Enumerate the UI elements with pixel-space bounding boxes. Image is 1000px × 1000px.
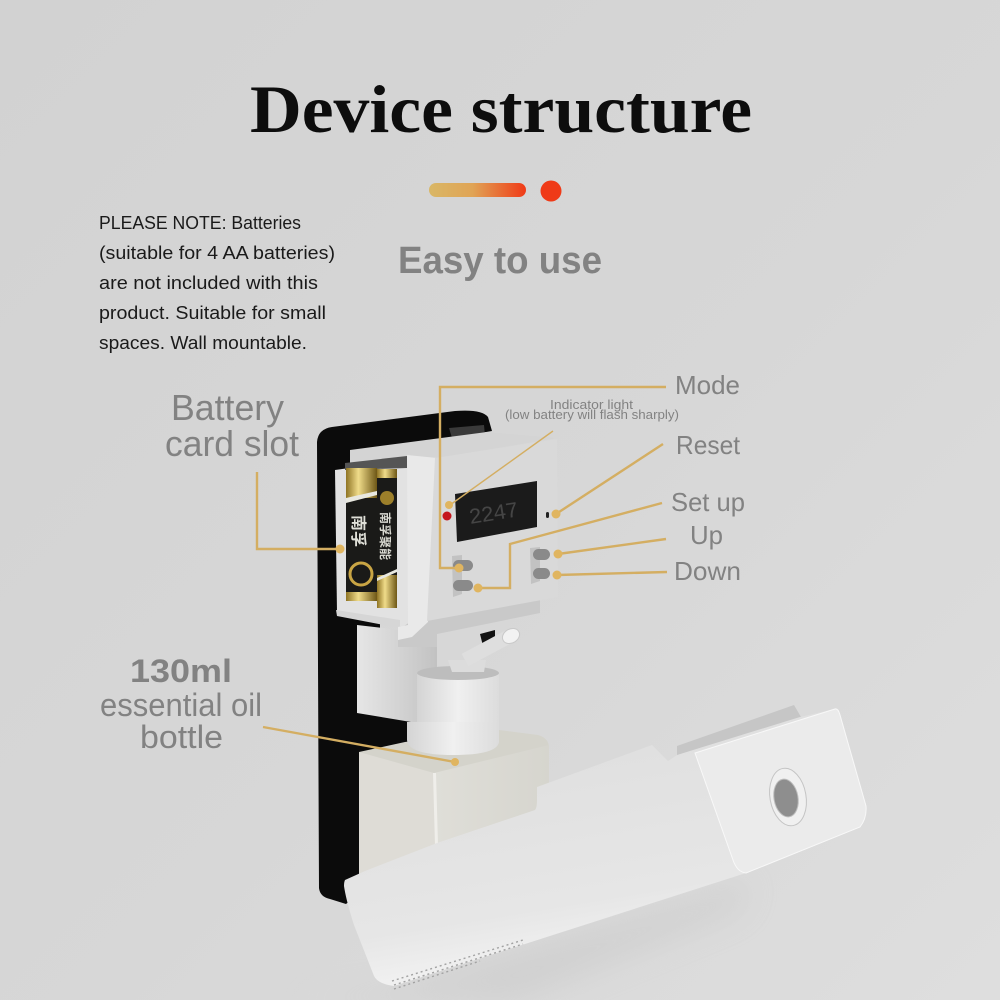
compartment floor bbox=[336, 610, 400, 628]
battery note bbox=[99, 213, 335, 353]
vent holes bbox=[392, 940, 523, 989]
LCD screen: 2247 bbox=[467, 498, 520, 531]
label: down: Down bbox=[674, 556, 741, 586]
nozzle bbox=[448, 625, 522, 672]
line: reset bbox=[556, 444, 663, 514]
label: indicator light: Indicator light bbox=[550, 397, 633, 412]
black back plate bbox=[317, 411, 492, 904]
callout lines bbox=[257, 387, 667, 762]
atomizer cylinder bbox=[407, 666, 499, 755]
batteries: 南孚 bbox=[349, 515, 367, 547]
label: battery card slot bbox=[165, 387, 299, 464]
module front face bbox=[427, 439, 558, 621]
battery note: are not included with this bbox=[99, 273, 318, 293]
callout dots bbox=[336, 501, 562, 766]
left button pair bbox=[452, 555, 473, 597]
lid body bbox=[344, 709, 866, 986]
label: 130ml essential oil bottle: essential oil bbox=[100, 687, 262, 723]
label: set up: Set up bbox=[671, 487, 745, 517]
line: down bbox=[557, 572, 667, 575]
decorative gradient bar and dot bbox=[429, 180, 562, 202]
mechanism block bbox=[357, 625, 437, 725]
module underside bbox=[398, 598, 540, 647]
line: bottle bbox=[263, 727, 455, 762]
sensor lens bbox=[765, 765, 811, 829]
lid cast shadow bbox=[290, 880, 750, 1000]
title: Device structure bbox=[250, 71, 752, 147]
battery note: product. Suitable for small bbox=[99, 303, 326, 323]
lid cap bbox=[695, 709, 866, 873]
LCD screen bbox=[455, 481, 537, 542]
label: 130ml essential oil bottle bbox=[100, 653, 262, 755]
batteries bbox=[346, 468, 397, 608]
label: battery card slot: Battery bbox=[171, 387, 284, 428]
compartment shadow bbox=[345, 456, 407, 470]
top button bbox=[449, 425, 485, 438]
label: indicator light: (low battery will flash sharply) bbox=[505, 407, 679, 422]
label: 130ml essential oil bottle: 130ml bbox=[130, 653, 232, 689]
reset pinhole bbox=[546, 512, 549, 518]
module top surface bbox=[350, 432, 557, 464]
battery note: PLEASE NOTE: Batteries bbox=[99, 213, 301, 233]
batteries: 南孚聚能 bbox=[378, 512, 393, 560]
label: up: Up bbox=[690, 520, 723, 550]
oil bottle bbox=[359, 730, 549, 880]
label: mode: Mode bbox=[675, 370, 740, 400]
label: battery card slot: card slot bbox=[165, 423, 299, 464]
label: reset: Reset bbox=[676, 430, 741, 460]
subheading: Easy to use bbox=[398, 240, 602, 282]
lid gap bbox=[677, 705, 801, 756]
line: set up bbox=[478, 503, 662, 588]
module left strip bbox=[398, 455, 437, 640]
label: 130ml essential oil bottle: bottle bbox=[140, 719, 223, 755]
line: battery slot bbox=[257, 472, 340, 549]
battery note: (suitable for 4 AA batteries) bbox=[99, 243, 335, 263]
line: up bbox=[558, 539, 666, 554]
line: indicator light bbox=[450, 431, 553, 505]
device illustration bbox=[317, 411, 558, 904]
indicator light bbox=[442, 512, 452, 520]
line: mode bbox=[440, 387, 666, 568]
battery note: spaces. Wall mountable. bbox=[99, 333, 307, 353]
battery compartment bbox=[335, 460, 408, 628]
right button pair bbox=[530, 547, 550, 584]
label: indicator light bbox=[505, 397, 679, 422]
front lid bbox=[344, 705, 866, 989]
